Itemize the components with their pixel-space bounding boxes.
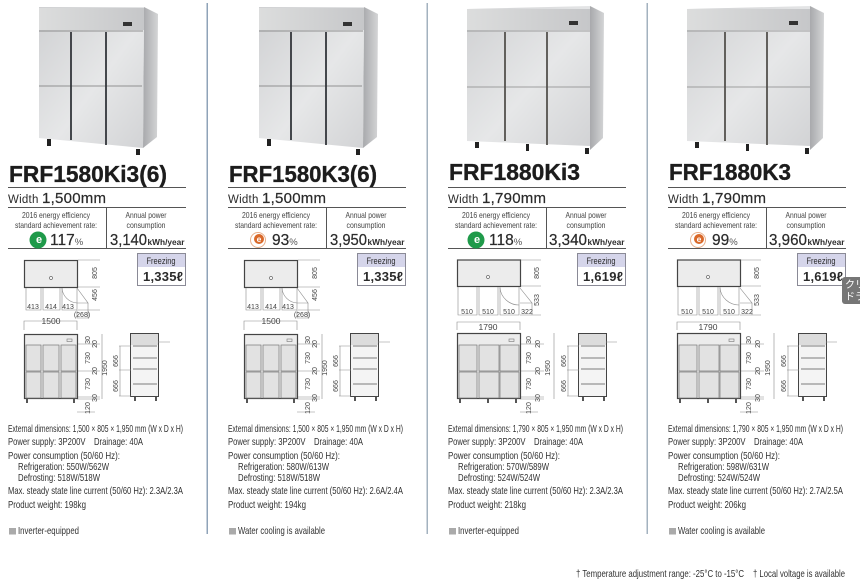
specifications text [228, 423, 403, 511]
specifications text: Max. steady state line current (50/60 Hz): 2.6A/2.4A [228, 485, 403, 497]
spec table: 99% [712, 232, 738, 249]
specifications text: Product weight: 218kg [448, 499, 526, 511]
freezing capacity [138, 254, 186, 286]
diagram: front view: 730 [85, 352, 92, 364]
diagram: front view [457, 322, 554, 414]
icon: energy rating [250, 232, 266, 248]
specifications text: Power consumption (50/60 Hz): [668, 450, 780, 462]
diagram: front view: 1950 [322, 360, 329, 376]
diagram: front view: 30 [535, 394, 542, 402]
diagram: front view: 1790 [479, 322, 498, 332]
icon: energy rating: e [474, 234, 480, 246]
feature note [669, 525, 765, 537]
specifications text: Product weight: 206kg [668, 499, 746, 511]
feature note [229, 525, 325, 537]
model name: FRF1580K3(6) [229, 161, 377, 187]
spec table: kWh/year [808, 237, 845, 247]
feature note [9, 525, 79, 537]
diagram: front view: 30 [746, 336, 753, 344]
diagram: plan view: 805 [754, 267, 761, 279]
diagram: front view: 20 [755, 367, 762, 375]
specifications text: Power supply: 3P200V Drainage: 40A [448, 436, 583, 448]
feature note: Inverter-equipped [458, 525, 519, 537]
spec table: 2016 energy efficiency [462, 210, 531, 220]
diagram: plan view [244, 260, 320, 319]
diagram: plan view: 414 [265, 304, 277, 311]
diagram: front view: 20 [535, 340, 542, 348]
photo: refrigerator [467, 6, 604, 154]
diagram: plan view: 510 [482, 309, 494, 316]
diagram: side view [333, 334, 390, 401]
specifications text: Defrosting: 518W/518W [238, 472, 320, 484]
diagram: plan view: 805 [534, 267, 541, 279]
diagram: front view: 1790 [699, 322, 718, 332]
freezing capacity: Freezing [806, 256, 836, 267]
icon: energy rating: e [257, 234, 262, 244]
diagram: front view: 120 [305, 402, 312, 414]
spec table: Annual power [786, 210, 827, 220]
diagram: front view: 120 [526, 402, 533, 414]
diagram: plan view: 414 [45, 304, 57, 311]
feature note: Inverter-equipped [18, 525, 79, 537]
icon: energy rating [690, 232, 706, 248]
diagram: front view: 730 [85, 378, 92, 390]
diagram: front view: 1950 [102, 360, 109, 376]
spec table: 117% [50, 232, 84, 249]
specifications text [448, 423, 623, 511]
freezing capacity: 1,335ℓ [363, 269, 403, 284]
diagram: front view: 730 [746, 352, 753, 364]
width: Width 1,790mm [668, 190, 766, 207]
diagram: side view: 666 [561, 355, 568, 367]
specifications text: Power supply: 3P200V Drainage: 40A [8, 436, 143, 448]
specifications text: Refrigeration: 550W/562W [18, 461, 109, 473]
spec table: Annual power [346, 210, 387, 220]
diagram: front view: 30 [312, 394, 319, 402]
model name: FRF1880K3 [669, 159, 791, 185]
diagram: side view: 666 [781, 380, 788, 392]
specifications text: Power supply: 3P200V Drainage: 40A [668, 436, 803, 448]
diagram: plan view: 805 [312, 267, 319, 279]
diagram: front view: 30 [85, 336, 92, 344]
spec table: consumption [126, 220, 166, 230]
specifications text: Refrigeration: 580W/613W [238, 461, 329, 473]
diagram: front view [677, 322, 774, 414]
diagram: side view [781, 334, 837, 401]
freezing capacity: Freezing [146, 256, 176, 267]
diagram: plan view: 322 [741, 309, 753, 316]
photo: refrigerator [687, 6, 824, 154]
diagram: plan view [24, 260, 100, 319]
diagram: front view: 20 [92, 367, 99, 375]
diagram: front view: 1950 [765, 360, 772, 376]
spec table [668, 188, 846, 249]
column divider 2 [426, 3, 428, 534]
spec table: consumption [346, 220, 386, 230]
diagram: front view: 1950 [545, 360, 552, 376]
spec table: 3,340 [549, 232, 587, 249]
freezing capacity: 1,619ℓ [583, 269, 623, 284]
specifications text: Max. steady state line current (50/60 Hz): 2.3A/2.3A [448, 485, 623, 497]
diagram: plan view: 413 [62, 304, 74, 311]
spec table: consumption [786, 220, 826, 230]
width: Width 1,790mm [448, 190, 546, 207]
specifications text [8, 423, 183, 511]
specifications text: External dimensions: 1,790 × 805 × 1,950 mm (W x D x H) [448, 423, 623, 435]
diagram: plan view: 413 [247, 304, 259, 311]
diagram: plan view: 510 [681, 309, 693, 316]
spec table: kWh/year [588, 237, 625, 247]
diagram: front view: 20 [755, 340, 762, 348]
icon: energy rating [468, 232, 484, 248]
photo: refrigerator [259, 7, 378, 155]
spec table [8, 188, 186, 249]
specifications text: External dimensions: 1,500 × 805 × 1,950 mm (W x D x H) [8, 423, 183, 435]
model name: FRF1580Ki3(6) [9, 161, 167, 187]
panel: FRF1580K3(6) [228, 7, 406, 537]
diagram: front view: 1500 [42, 316, 61, 326]
icon: energy rating: e [697, 234, 702, 244]
photo: refrigerator [39, 7, 158, 155]
diagram: plan view: 413 [282, 304, 294, 311]
diagram: front view: 20 [312, 340, 319, 348]
spec table: 118% [489, 232, 523, 249]
spec table: standard achievement rate: [455, 220, 537, 230]
feature note: Water cooling is available [678, 525, 765, 537]
diagram: side view: 666 [113, 380, 120, 392]
diagram: side view: 666 [113, 355, 120, 367]
freezing capacity [358, 254, 406, 286]
panel: FRF1880K3 [668, 6, 846, 537]
panel: FRF1880Ki3 [448, 6, 626, 537]
diagram: front view: 30 [92, 394, 99, 402]
diagram: plan view: 413 [27, 304, 39, 311]
diagram: plan view: 805 [92, 267, 99, 279]
diagram: front view: 30 [755, 394, 762, 402]
specifications text: Power consumption (50/60 Hz): [8, 450, 120, 462]
specifications text: Refrigeration: 570W/589W [458, 461, 549, 473]
diagram: front view: 120 [746, 402, 753, 414]
spec table: Annual power [126, 210, 167, 220]
freezing capacity: 1,335ℓ [143, 269, 183, 284]
diagram: plan view: 510 [702, 309, 714, 316]
diagram: plan view: 456 [92, 289, 99, 301]
specifications text: Product weight: 198kg [8, 499, 86, 511]
specifications text: Power consumption (50/60 Hz): [228, 450, 340, 462]
icon: energy rating: e [36, 234, 42, 246]
diagram: front view: 730 [526, 378, 533, 390]
spec table: 2016 energy efficiency [682, 210, 751, 220]
column divider 3 [646, 3, 648, 534]
diagram: side view: 666 [333, 355, 340, 367]
diagram: front view: 730 [305, 352, 312, 364]
column divider 1 [206, 3, 208, 534]
diagram: side view: 666 [781, 355, 788, 367]
diagram: front view [24, 316, 109, 414]
specifications text: Max. steady state line current (50/60 Hz): 2.3A/2.3A [8, 485, 183, 497]
freezing capacity [578, 254, 626, 286]
diagram: front view: 20 [92, 340, 99, 348]
spec table: consumption [566, 220, 606, 230]
width: Width 1,500mm [8, 190, 106, 207]
specifications text: Defrosting: 524W/524W [458, 472, 540, 484]
freezing capacity: 1,619ℓ [803, 269, 843, 284]
diagram: plan view: 510 [723, 309, 735, 316]
specifications text: External dimensions: 1,500 × 805 × 1,950 mm (W x D x H) [228, 423, 403, 435]
diagram: plan view [458, 260, 541, 316]
spec table: standard achievement rate: [15, 220, 97, 230]
diagram: front view: 30 [305, 336, 312, 344]
freezing capacity: Freezing [586, 256, 616, 267]
specifications text: Defrosting: 524W/524W [678, 472, 760, 484]
diagram: side view [561, 334, 617, 401]
diagram: front view: 30 [526, 336, 533, 344]
spec table: 3,140 [110, 232, 147, 249]
specifications text: Product weight: 194kg [228, 499, 306, 511]
spec table: kWh/year [368, 237, 405, 247]
specifications text: Power consumption (50/60 Hz): [448, 450, 560, 462]
spec table: 3,960 [769, 232, 807, 249]
diagram: front view: 120 [85, 402, 92, 414]
diagram: plan view: 510 [503, 309, 515, 316]
spec table: 2016 energy efficiency [22, 210, 91, 220]
spec table [448, 188, 626, 249]
diagram: side view: 666 [333, 380, 340, 392]
diagram: front view: 730 [746, 378, 753, 390]
feature note [449, 525, 519, 537]
panel: FRF1580Ki3(6) [8, 7, 186, 537]
specifications text: Power supply: 3P200V Drainage: 40A [228, 436, 363, 448]
diagram: plan view: (268) [74, 312, 90, 319]
diagram: front view: 730 [526, 352, 533, 364]
diagram: plan view: (268) [294, 312, 310, 319]
spec table: Annual power [566, 210, 607, 220]
diagram: plan view: 322 [521, 309, 533, 316]
diagram: plan view [678, 260, 761, 316]
spec table: standard achievement rate: [675, 220, 757, 230]
diagram: front view: 730 [305, 378, 312, 390]
diagram: front view [244, 316, 329, 414]
specifications text: Refrigeration: 598W/631W [678, 461, 769, 473]
spec table: 93% [272, 232, 298, 249]
specifications text [668, 423, 843, 511]
diagram: front view: 20 [312, 367, 319, 375]
model name: FRF1880Ki3 [449, 159, 580, 185]
spec table: kWh/year [148, 237, 185, 247]
freezing capacity: Freezing [366, 256, 396, 267]
spec table: 2016 energy efficiency [242, 210, 311, 220]
diagram: plan view: 533 [754, 294, 761, 306]
diagram: front view: 1500 [262, 316, 281, 326]
freezing capacity [798, 254, 846, 286]
diagram: plan view: 533 [534, 294, 541, 306]
diagram: side view [113, 334, 170, 401]
diagram: side view: 666 [561, 380, 568, 392]
overlay tab [842, 277, 860, 304]
icon: energy rating [30, 232, 46, 248]
diagram: plan view: 456 [312, 289, 319, 301]
diagram: front view: 20 [535, 367, 542, 375]
feature note: Water cooling is available [238, 525, 325, 537]
spec table [228, 188, 406, 249]
spec table: 3,950 [330, 232, 367, 249]
specifications text: Defrosting: 518W/518W [18, 472, 100, 484]
diagram: plan view: 510 [461, 309, 473, 316]
footnotes: † Temperature adjustment range: -25°C to -15°C [576, 568, 744, 580]
width: Width 1,500mm [228, 190, 326, 207]
spec table: standard achievement rate: [235, 220, 317, 230]
